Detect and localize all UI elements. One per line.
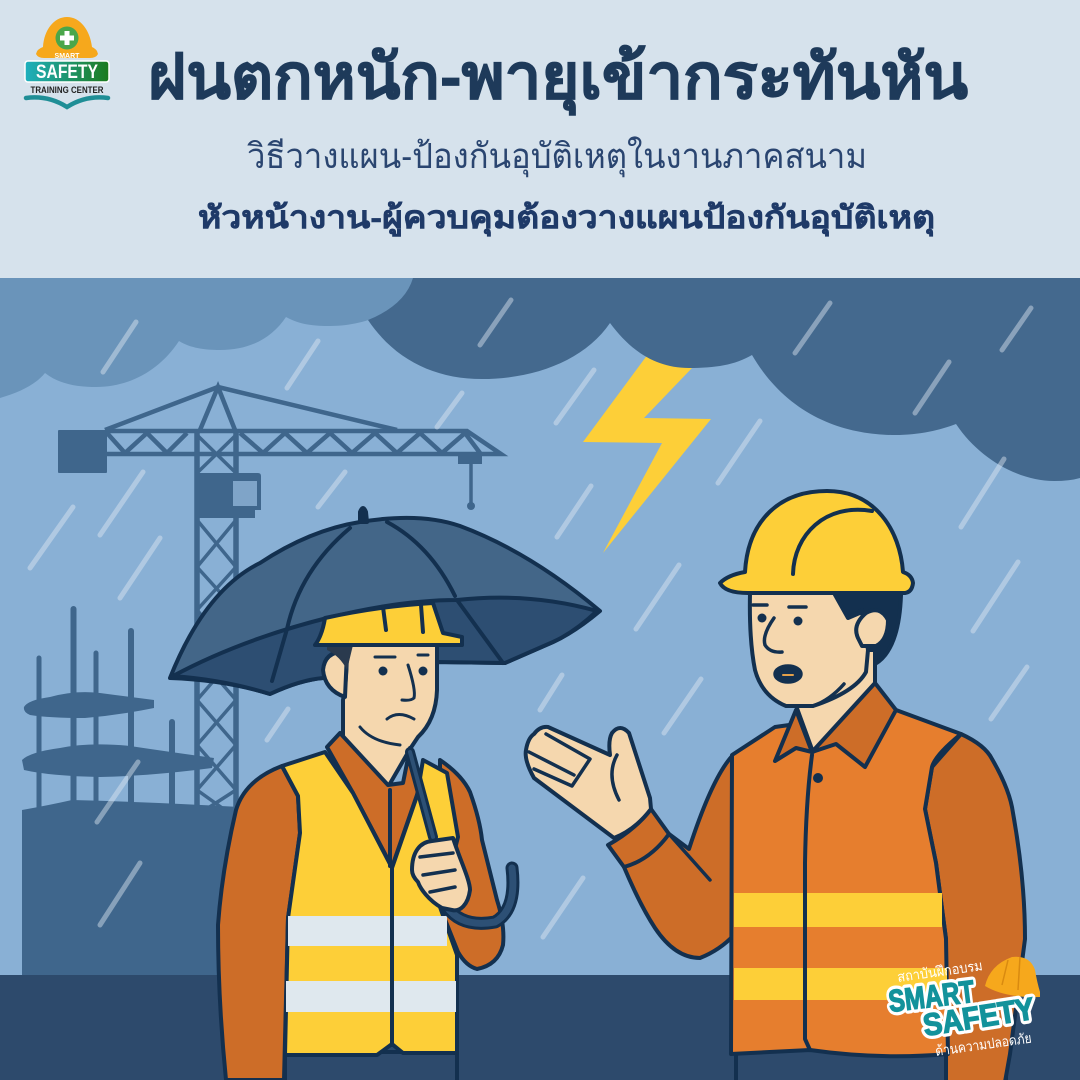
fingers [420,853,455,892]
cloud: right dark [368,278,1080,481]
nose [764,618,782,652]
hat ridge [793,510,872,574]
subtitle: วิธีวางแผน-ป้องกันอุบัติเหตุในงานภาคสนาม [247,136,867,177]
crane hook [458,456,482,510]
vest reflective stripes [286,916,456,1012]
jacket zip line [805,755,812,1050]
crease [669,834,710,880]
crane counterweight [58,430,107,473]
icon: open book [26,97,108,107]
pocket button [815,775,821,781]
person: worker with umbrella [170,508,600,1080]
umbrella underside [173,598,597,694]
floor slabs [22,692,214,777]
icon: green cross [56,26,78,50]
trousers [736,1050,1006,1080]
logo small word: SMART [55,53,80,60]
hat ridges [383,605,423,632]
crane cab [195,473,261,518]
mouth [775,666,801,682]
open hand [526,727,651,838]
brows [753,605,806,607]
thumb crease [612,755,619,800]
collar [327,733,418,867]
left sleeve [218,766,300,1080]
crane mast bracing [197,435,236,810]
tower crane [58,387,501,810]
crane top [105,387,397,430]
badge word safety: SAFETY [921,991,1037,1043]
jacket yellow stripes [734,893,947,1000]
face [750,593,868,706]
right sleeve [440,760,503,969]
person: supervisor gesturing [526,491,1025,1080]
back hair [834,595,901,664]
hard hat [720,491,913,593]
icon: logo helmet [36,17,98,58]
jaw smile [813,684,844,706]
umbrella hook [447,868,513,923]
hair [327,645,353,670]
building base [22,800,240,975]
crane jib [105,431,501,454]
ground [0,975,1080,1080]
trousers [285,1052,457,1080]
cloud: left light [0,278,420,398]
badge word smart: SMART [887,974,976,1019]
rain [30,300,1031,937]
badge word smart: SMART [887,974,976,1019]
logo: smart safety badge [887,957,1040,1059]
collar [775,683,896,767]
eyes [378,666,428,676]
facial features [360,655,428,745]
nose [402,665,414,700]
jacket [731,710,961,1056]
building under construction [22,606,240,975]
umbrella pole [410,752,433,837]
eyes [758,614,802,626]
umbrella canopy [170,518,600,694]
ear [856,610,888,646]
mouth [387,714,414,719]
face and neck [343,645,437,787]
crane mast [197,432,236,810]
icon: lightning bolt [583,350,711,553]
logo: smart safety training center [25,17,109,107]
umbrella ribs [272,522,503,681]
sky [0,278,1080,1080]
icon: badge helmet [985,957,1040,997]
forearm sleeve [624,754,734,958]
header panel [0,0,1080,278]
vest [282,752,458,1055]
brows [375,655,428,657]
logo banner: SAFETY [36,62,98,83]
right sleeve [925,734,1025,1080]
neck [794,650,875,752]
face details [753,605,844,706]
fingers [529,734,590,786]
badge top line: สถาบันฝึกอบรม [896,957,984,985]
hand on pole [412,838,470,910]
illustration scene [0,278,1080,1080]
vest centre line [390,790,392,1045]
cuff [608,809,669,867]
jaw line [360,727,400,745]
logo caption: TRAINING CENTER [30,85,104,96]
supervisor message: หัวหน้างาน-ผู้ควบคุมต้องวางแผนป้องกันอุบัติเหตุ [198,200,935,237]
badge bottom line: ด้านความปลอดภัย [934,1030,1032,1059]
badge word safety: SAFETY [921,991,1037,1043]
ear [323,652,347,697]
title: ฝนตกหนัก-พายุเข้ากระทันหัน [148,43,968,115]
umbrella knob [360,508,367,522]
scaffold poles [36,606,175,810]
hard hat small [315,603,462,645]
